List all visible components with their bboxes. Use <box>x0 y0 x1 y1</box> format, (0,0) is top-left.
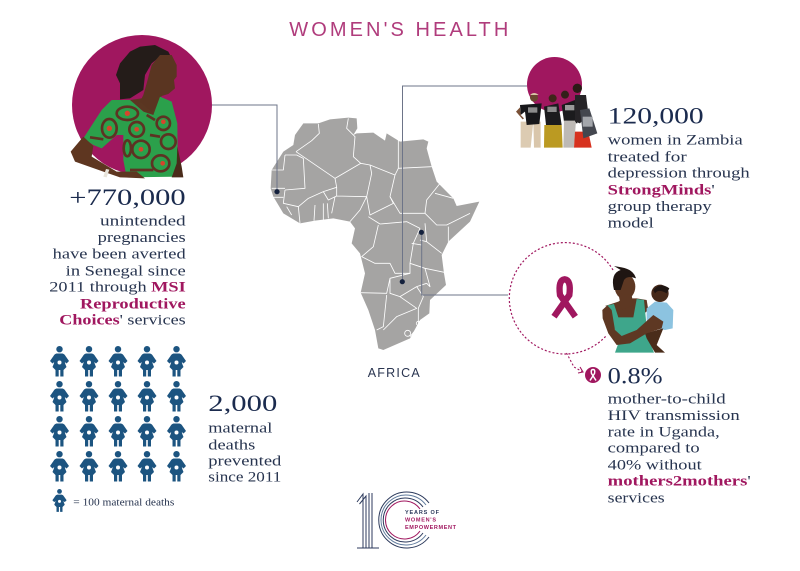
logo text: WOMEN'S <box>405 518 436 524</box>
icon: ribbon <box>554 279 575 317</box>
description: mother-to-child <box>608 391 726 407</box>
description: unintended <box>100 214 186 230</box>
description: have been averted <box>53 247 186 263</box>
description: since 2011 <box>208 470 281 486</box>
description <box>608 132 750 231</box>
description: StrongMinds ' <box>608 182 715 198</box>
photo: mother and child <box>602 266 673 353</box>
panel: Uganda <box>509 243 751 506</box>
legend: pictogram key <box>52 489 174 512</box>
description: mothers2mothers ' <box>608 474 751 490</box>
map outline <box>271 118 479 350</box>
description <box>49 214 186 329</box>
description: 40% without <box>608 457 703 473</box>
panel: maternal deaths stat <box>208 391 282 486</box>
title: WOMEN'S HEALTH <box>289 19 508 41</box>
logo text: YEARS OF <box>405 510 440 516</box>
description: Reproductive <box>80 296 186 312</box>
panel: Senegal <box>49 35 212 329</box>
description: prevented <box>208 453 282 469</box>
legend: pictogram key: = 100 maternal deaths <box>73 498 174 509</box>
map country borders <box>272 118 470 337</box>
description: services <box>608 490 665 506</box>
description: women in Zambia <box>608 132 743 148</box>
magenta circle <box>72 35 212 175</box>
description: in Senegal since <box>66 264 186 280</box>
panel: Zambia <box>516 57 750 231</box>
description: compared to <box>608 441 700 457</box>
logo text: EMPOWERMENT <box>405 525 457 531</box>
connector: Uganda <box>419 230 508 295</box>
stat: 0.8%: 0.8% <box>608 363 663 388</box>
description: depression through <box>608 165 750 181</box>
magenta circle <box>527 57 582 112</box>
connector: Senegal <box>212 105 280 194</box>
icon: small ribbon badge <box>585 367 601 383</box>
description <box>608 391 751 506</box>
description: group therapy <box>608 199 712 215</box>
dotted circle <box>509 243 613 354</box>
logo: 10 years of women's empowerment <box>357 492 457 548</box>
description: 2011 through MSI <box>49 280 186 296</box>
description: HIV transmission <box>608 408 740 424</box>
description: model <box>608 215 654 231</box>
photo: woman in green dress <box>71 45 183 178</box>
stat: 2,000: 2,000 <box>208 391 277 416</box>
description: pregnancies <box>98 230 186 246</box>
description: treated for <box>608 149 687 165</box>
logo numeral 0 arcs <box>379 492 429 548</box>
description: deaths <box>208 437 255 453</box>
arrow <box>566 353 583 373</box>
connector: Zambia <box>400 86 527 284</box>
logo text <box>405 510 457 531</box>
map: Africa <box>271 118 479 350</box>
stat: 770,000: +770,000 <box>69 185 186 210</box>
photo: four women <box>516 84 597 148</box>
description <box>208 421 282 486</box>
description: Choices ' services <box>59 313 186 329</box>
icon: pregnant woman pictogram grid <box>50 346 186 482</box>
description: maternal <box>208 421 272 437</box>
logo numeral 1 <box>357 493 379 548</box>
stat: 120,000: 120,000 <box>608 103 704 128</box>
description: rate in Uganda, <box>608 425 720 441</box>
map label: AFRICA <box>368 366 420 380</box>
